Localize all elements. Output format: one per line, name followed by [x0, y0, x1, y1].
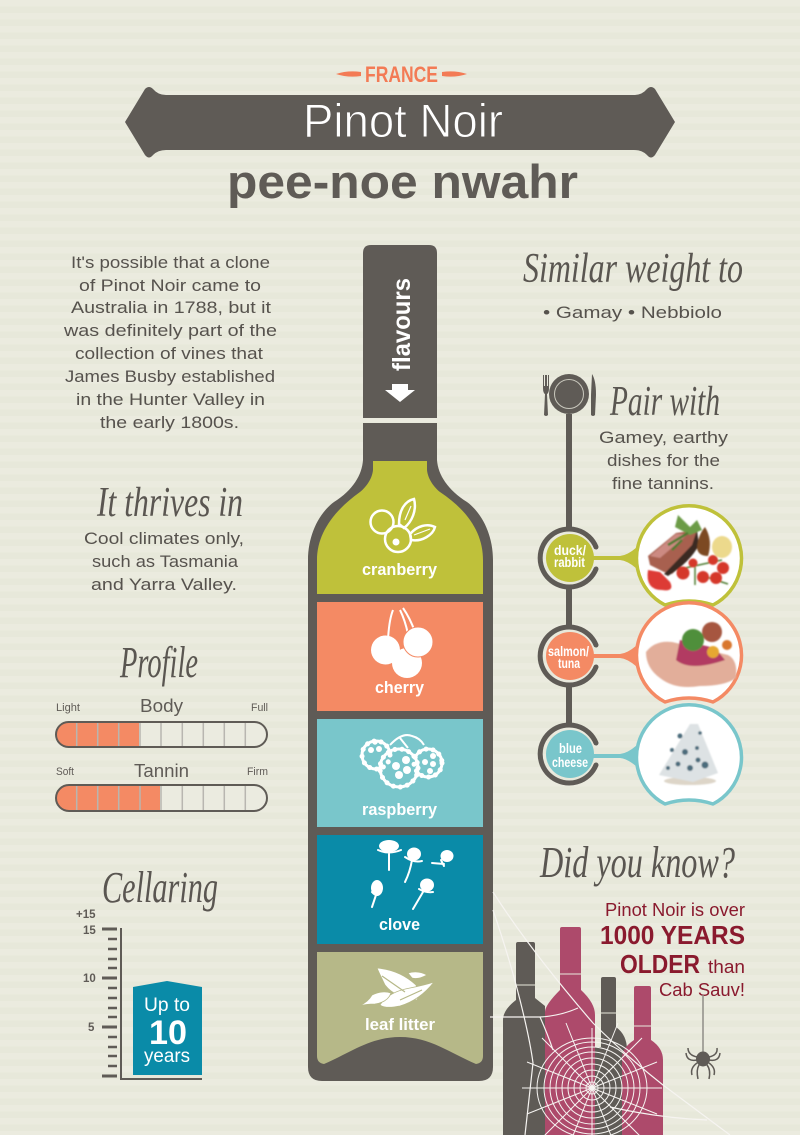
history text block: collection of vines that [75, 344, 263, 363]
flavour: clove [317, 835, 483, 944]
cellaring chart: 15 [83, 925, 96, 937]
history text block: the early 1800s. [100, 413, 239, 432]
did you know text block: OLDER [620, 949, 700, 979]
cellaring chart: years [144, 1046, 190, 1067]
bottle body [308, 423, 493, 1081]
cellaring chart: +15 [76, 909, 96, 921]
history text block [63, 253, 277, 432]
tannin scale: Soft [56, 766, 74, 778]
pairing: blue cheese: cheese [552, 754, 588, 770]
climate text block: Cool climates only, [84, 529, 244, 548]
history text block: Australia in 1788, but it [71, 298, 271, 317]
heading: did you know: Did you know? [539, 838, 735, 887]
tannin scale: Firm [247, 766, 268, 778]
climate text block [84, 529, 244, 594]
heading: it thrives in: It thrives in [96, 480, 243, 526]
did you know text block: Pinot Noir is over [605, 900, 745, 920]
pairing timeline line [566, 414, 572, 725]
flavour: cherry: cherry [375, 678, 425, 697]
heading: pair with: Pair with [609, 379, 720, 425]
cellaring chart: 10 [149, 1014, 187, 1052]
did you know text block [600, 900, 745, 1000]
pairing text block: dishes for the [607, 451, 720, 470]
pairing text block: Gamey, earthy [599, 428, 729, 447]
history text block: It's possible that a clone [71, 253, 270, 272]
flavour: cranberry: cranberry [362, 560, 438, 579]
history text block: was definitely part of the [63, 321, 277, 340]
pairing: duck/rabbit: duck/ [554, 542, 586, 558]
flavour: cherry [317, 602, 483, 711]
flavour: raspberry [317, 719, 483, 827]
heading: cellaring: Cellaring [102, 863, 218, 912]
pairing: duck/rabbit [540, 506, 742, 605]
spider web [490, 892, 730, 1135]
body scale [56, 696, 268, 747]
cellaring chart: Up to [144, 995, 190, 1016]
cellaring chart: 5 [88, 1022, 95, 1034]
climate text block: such as Tasmania [92, 552, 239, 571]
cellaring chart [76, 909, 202, 1079]
wine bottle: flavour chart [308, 245, 493, 1081]
flavour: leaf litter [317, 952, 483, 1064]
tannin scale: Tannin [134, 761, 189, 781]
header: country label [336, 62, 467, 87]
did you know text block: 1000 YEARS [600, 920, 745, 950]
title banner [125, 87, 675, 158]
pairing: salmon/tuna [540, 603, 742, 702]
pronunciation heading: pee-noe nwahr [227, 155, 578, 208]
bottle cap with flavours label [363, 245, 437, 418]
similar wines list: • Gamay • Nebbiolo [543, 303, 722, 322]
pairing: salmon/tuna: tuna [558, 655, 580, 671]
flavour: raspberry: raspberry [362, 800, 438, 819]
header: country label: FRANCE [365, 62, 438, 87]
pairing: blue cheese: blue [559, 740, 582, 756]
heading: profile: Profile [119, 638, 198, 687]
pairing text block [599, 428, 729, 493]
climate text block: and Yarra Valley. [91, 575, 237, 594]
body scale: Full [251, 702, 268, 714]
decorative bottles [503, 927, 663, 1135]
body scale: Light [56, 702, 80, 714]
flavour: leaf litter: leaf litter [365, 1015, 435, 1034]
bottle cap with flavours label: flavours [388, 278, 416, 371]
pairing: salmon/tuna: salmon/ [548, 643, 589, 659]
title banner: Pinot Noir [303, 94, 503, 147]
did you know text block: Cab Sauv! [659, 980, 745, 1000]
pairing text block: fine tannins. [612, 474, 714, 493]
icon: plate and cutlery [543, 374, 596, 416]
history text block: in the Hunter Valley in [76, 390, 265, 409]
history text block: of Pinot Noir came to [79, 276, 261, 295]
flavour: clove: clove [379, 915, 420, 934]
history text block: James Busby established [65, 367, 275, 386]
cellaring chart: 10 [83, 973, 96, 985]
pairing: duck/rabbit: rabbit [554, 554, 585, 570]
body scale: Body [140, 696, 183, 716]
icon: spider [686, 995, 720, 1079]
pairing: blue cheese [540, 705, 742, 804]
flavour: cranberry [317, 461, 483, 594]
tannin scale [56, 761, 268, 811]
did you know text block: than [708, 957, 745, 977]
